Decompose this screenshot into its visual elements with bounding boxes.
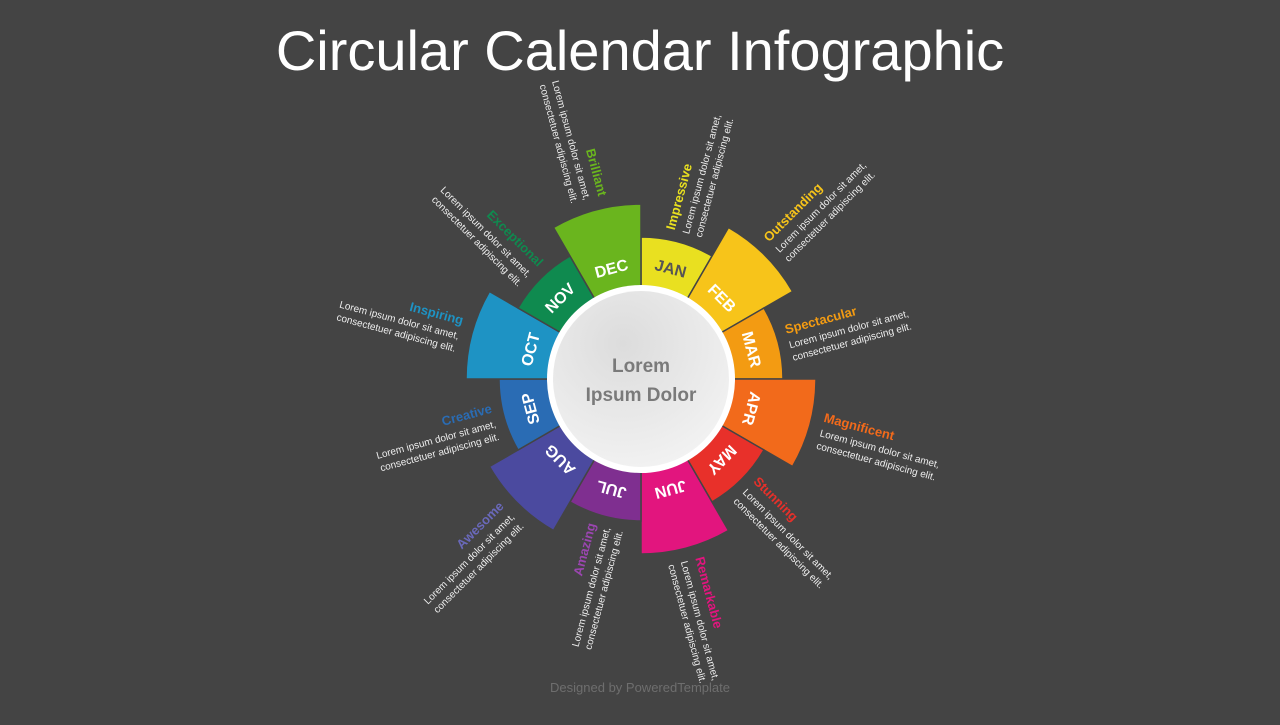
callout: Spectacular: Lorem ipsum dolor sit amet,: [788, 309, 910, 351]
callout: Impressive: Lorem ipsum dolor sit amet,: [681, 113, 724, 235]
segment: JUN: JUN: [653, 476, 688, 501]
callout: Outstanding: Lorem ipsum dolor sit amet,: [774, 160, 869, 255]
callout: Creative: Creative: [440, 401, 493, 429]
segment: OCT: [460, 290, 573, 401]
segment: DEC: DEC: [593, 257, 631, 282]
segment: FEB: FEB: [704, 281, 739, 316]
callout: Outstanding: Outstanding: [761, 180, 825, 245]
callout: Inspiring: consectetuer adipiscing elit.: [335, 312, 457, 355]
segment: DEC: [552, 198, 663, 311]
callout: Amazing: [552, 521, 626, 651]
callout: Awesome: [409, 499, 526, 616]
center circle: Lorem: [612, 356, 670, 377]
callout: Awesome: Lorem ipsum dolor sit amet,: [422, 512, 517, 607]
callout: Creative: Lorem ipsum dolor sit amet,: [375, 419, 497, 462]
callout: Exceptional: consectetuer adipiscing elit.: [429, 195, 524, 289]
callout: Brilliant: Brilliant: [583, 147, 610, 198]
segment: APR: APR: [738, 390, 763, 427]
callout: Spectacular: Spectacular: [783, 303, 858, 337]
callout: Stunning: Stunning: [751, 474, 801, 524]
callout: Creative: consectetuer adipiscing elit.: [379, 432, 501, 474]
segment: MAY: [673, 411, 767, 505]
callouts: [335, 75, 945, 685]
callout: Creative: [370, 401, 501, 474]
segment: JUL: JUL: [595, 476, 628, 501]
circular calendar wheel: [460, 198, 822, 560]
callout: Exceptional: Lorem ipsum dolor sit amet,: [438, 185, 533, 280]
callout: Brilliant: Lorem ipsum dolor sit amet,: [549, 79, 592, 201]
callout: Magnificent: consectetuer adipiscing elit.: [815, 441, 937, 483]
callout: Stunning: Lorem ipsum dolor sit amet,: [740, 487, 835, 582]
callout: Remarkable: consectetuer adipiscing elit.: [665, 563, 708, 685]
segment: NOV: [515, 253, 609, 347]
callout: Outstanding: consectetuer adipiscing elit.: [783, 170, 878, 264]
segment: APR: [709, 357, 822, 468]
callout: Inspiring: Inspiring: [408, 299, 465, 328]
title: Circular Calendar Infographic: [276, 19, 1004, 82]
callout: Spectacular: [783, 290, 913, 364]
segment: MAR: MAR: [738, 330, 764, 370]
segment: AUG: AUG: [542, 441, 579, 478]
segment: SEP: [494, 365, 571, 451]
callout: Exceptional: [429, 172, 546, 289]
callout: Awesome: consectetuer adipiscing elit.: [432, 521, 526, 616]
callout: Remarkable: Lorem ipsum dolor sit amet,: [678, 560, 720, 682]
callout: Stunning: [731, 474, 848, 591]
callout: Impressive: consectetuer adipiscing elit.: [694, 117, 736, 239]
segment: JAN: [627, 232, 713, 309]
callout: Magnificent: Lorem ipsum dolor sit amet,: [819, 428, 941, 471]
segment: JAN: JAN: [653, 257, 688, 282]
callout: Outstanding: [761, 147, 878, 264]
segment: FEB: [667, 223, 797, 353]
segment: OCT: OCT: [519, 331, 544, 368]
callout: Magnificent: [815, 410, 945, 483]
callout: Awesome: Awesome: [453, 499, 507, 552]
footer: Designed by PoweredTemplate: [550, 680, 730, 695]
segment: MAY: MAY: [703, 441, 739, 478]
segment: NOV: NOV: [542, 280, 579, 317]
segment: JUL: [569, 449, 655, 526]
callout: Brilliant: consectetuer adipiscing elit.: [537, 83, 579, 205]
center circle: [547, 285, 735, 473]
callout: Magnificent: Magnificent: [822, 410, 897, 443]
center circle: Ipsum Dolor: [586, 385, 697, 406]
callout: Spectacular: consectetuer adipiscing elit.: [791, 321, 913, 364]
callout: Brilliant: [537, 75, 610, 205]
segment: MAR: [711, 307, 788, 393]
callout: Remarkable: [665, 555, 739, 685]
callout: Amazing: Amazing: [570, 521, 599, 577]
segment: JUN: [619, 447, 730, 560]
callout: Remarkable: Remarkable: [692, 555, 726, 630]
callout: Amazing: consectetuer adipiscing elit.: [583, 529, 626, 651]
callout: Stunning: consectetuer adipiscing elit.: [731, 496, 825, 591]
callout: Inspiring: Lorem ipsum dolor sit amet,: [338, 300, 460, 342]
segment: SEP: SEP: [519, 390, 544, 426]
callout: Inspiring: [335, 281, 465, 355]
callout: Impressive: Impressive: [663, 162, 695, 231]
callout: Impressive: [663, 108, 736, 239]
callout: Exceptional: Exceptional: [484, 207, 546, 269]
segment: AUG: [485, 405, 615, 535]
callout: Amazing: Lorem ipsum dolor sit amet,: [571, 526, 613, 648]
